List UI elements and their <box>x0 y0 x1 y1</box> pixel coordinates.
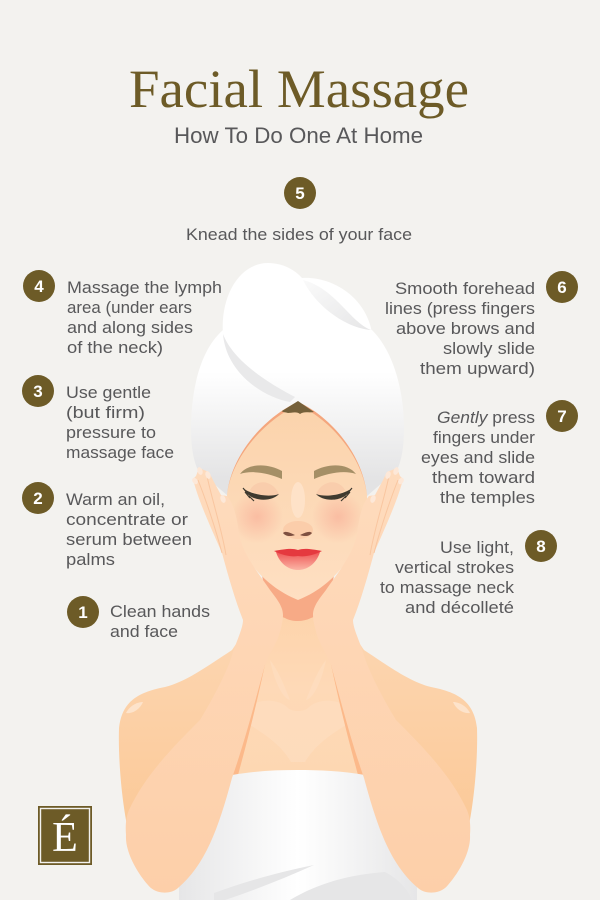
right fingernails <box>369 466 405 504</box>
shoulders and chest <box>119 600 477 825</box>
step 6 text: Smooth forehead <box>395 279 535 298</box>
step 1 text: Clean hands <box>110 602 210 621</box>
step 6 text: them upward) <box>420 359 535 378</box>
step 7 badge <box>546 400 578 432</box>
neck and upper chest <box>234 600 362 775</box>
hair <box>282 401 314 414</box>
step 3 text: massage face <box>66 443 174 462</box>
step 8 text: Use light, <box>440 538 514 557</box>
step 3 badge: 3 <box>33 382 43 401</box>
step 6 <box>385 271 578 378</box>
face <box>227 402 367 600</box>
step 8 text: and décolleté <box>405 598 514 617</box>
right arm and hand <box>313 466 470 893</box>
eyes <box>243 482 352 501</box>
hairline <box>227 402 367 495</box>
step 6 text <box>385 279 535 378</box>
collarbone highlights <box>250 660 346 762</box>
step 5 badge: 5 <box>295 184 305 203</box>
step 8 badge <box>525 530 557 562</box>
step 7 text: them toward <box>432 468 535 487</box>
nose <box>283 482 313 539</box>
step 4 badge: 4 <box>34 277 44 296</box>
logo: É <box>52 814 78 861</box>
step 7 text <box>421 408 535 507</box>
step 2 text: Warm an oil, <box>66 490 165 509</box>
step 4 text: and along sides <box>67 318 193 337</box>
step 7 text: eyes and slide <box>421 448 535 467</box>
step 8 <box>380 530 557 617</box>
step 4 text: Massage the lymph <box>67 278 222 297</box>
subtitle: How To Do One At Home <box>174 123 423 148</box>
step 3 text <box>66 383 174 462</box>
step 3 badge <box>22 375 54 407</box>
step 8 text <box>380 538 515 617</box>
step 2 badge: 2 <box>33 489 43 508</box>
step 5 text: Knead the sides of your face <box>186 225 412 244</box>
step 1 text <box>110 602 210 641</box>
step 6 badge <box>546 271 578 303</box>
step 5 <box>186 177 412 244</box>
step 3 text: pressure to <box>66 423 156 442</box>
step 4 text <box>67 278 222 357</box>
step 1 text: and face <box>110 622 178 641</box>
left fingernails <box>191 466 227 504</box>
arm shadow strips <box>232 650 364 775</box>
step 6 text: slowly slide <box>443 339 535 358</box>
step 2 text: serum between <box>66 530 192 549</box>
step 3 text: Use gentle <box>66 383 151 402</box>
towel grey fold: left <box>223 334 295 402</box>
under-chin shadow <box>262 575 334 621</box>
step 4 <box>23 270 222 357</box>
step 2 text: concentrate or <box>66 510 188 529</box>
step 8 text: vertical strokes <box>395 558 514 577</box>
step 6 badge: 6 <box>557 278 567 297</box>
head towel <box>191 330 404 496</box>
step 1 badge <box>67 596 99 628</box>
step 7 text: fingers under <box>433 428 535 447</box>
step 2 <box>22 482 192 569</box>
logo <box>38 806 92 865</box>
shoulder highlights <box>126 702 470 713</box>
step 3 <box>22 375 174 462</box>
wrapped towel <box>179 770 417 900</box>
towel grey fold: right <box>303 280 371 330</box>
step 7 text: Gently press <box>437 408 535 427</box>
step 4 badge <box>23 270 55 302</box>
step 2 text: palms <box>66 550 115 569</box>
illustration: woman with towel <box>119 263 477 900</box>
step 5 badge <box>284 177 316 209</box>
towel folds <box>214 865 412 900</box>
title: Facial Massage <box>129 59 469 119</box>
step 8 text: to massage neck <box>380 578 515 597</box>
step 2 badge <box>22 482 54 514</box>
step 3 text: (but firm) <box>66 403 145 422</box>
step 4 text: of the neck) <box>67 338 163 357</box>
lips <box>274 549 322 570</box>
step 8 badge: 8 <box>536 537 546 556</box>
left finger lines <box>198 476 226 555</box>
step 2 text <box>66 490 192 569</box>
step 4 text: area (under ears <box>67 298 192 317</box>
step 7 text: the temples <box>440 488 535 507</box>
towel top lobes <box>223 263 372 402</box>
step 1 <box>67 596 210 641</box>
step 1 badge: 1 <box>78 603 88 622</box>
step 6 text: lines (press fingers <box>385 299 535 318</box>
step 6 text: above brows and <box>396 319 535 338</box>
step 7 badge: 7 <box>557 407 567 426</box>
step 7 <box>421 400 578 507</box>
eyebrows <box>240 465 356 479</box>
right finger lines <box>370 476 398 555</box>
left arm and hand <box>126 466 283 893</box>
blush <box>231 491 364 543</box>
